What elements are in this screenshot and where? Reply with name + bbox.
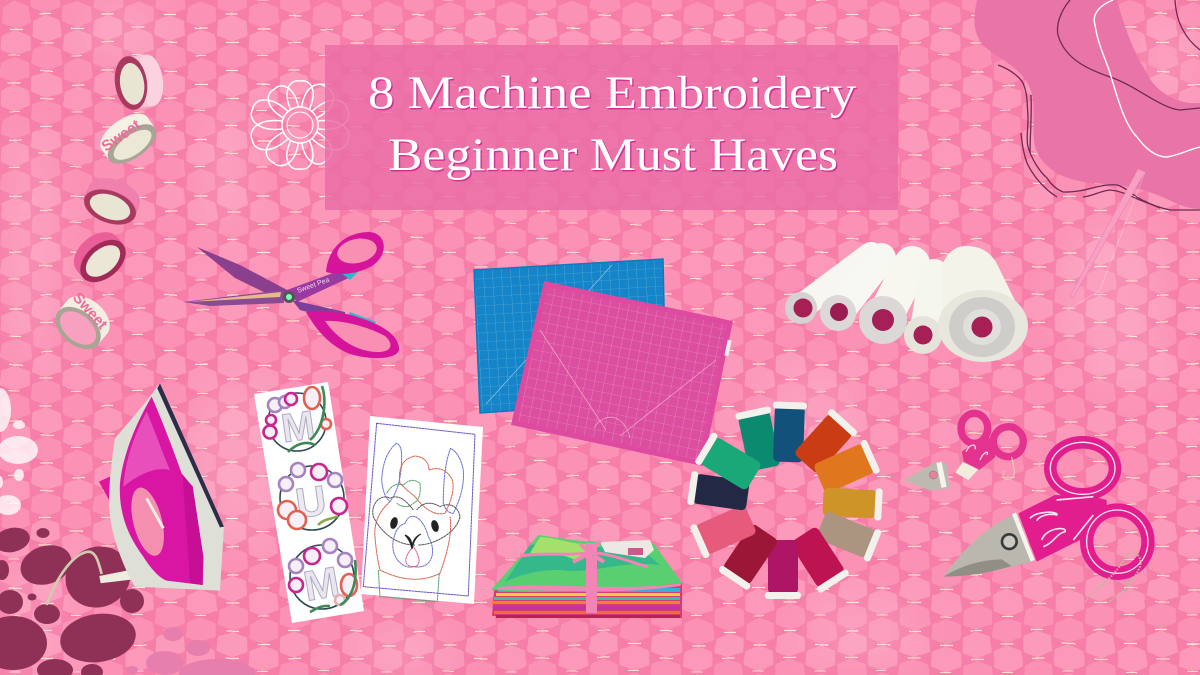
left-edge white pebbles xyxy=(0,388,38,515)
bottom-left dark pebbles xyxy=(0,525,144,675)
spool: teal xyxy=(735,406,783,472)
title: Beginner Must Haves xyxy=(388,129,838,181)
green top fabric xyxy=(491,535,682,592)
spool: red xyxy=(792,408,858,476)
title xyxy=(368,67,857,181)
spool: green xyxy=(694,432,763,493)
bead chain xyxy=(1085,553,1141,603)
roll 1 xyxy=(785,255,871,324)
wreath M top: M xyxy=(279,403,318,451)
tape roll 3 xyxy=(79,171,145,231)
roll 4 xyxy=(904,274,942,354)
spool: magenta xyxy=(765,540,801,599)
title panel xyxy=(325,45,898,210)
icon: needle xyxy=(1068,169,1145,310)
wreath M bottom xyxy=(289,539,357,612)
card: monogram wreaths xyxy=(254,382,364,623)
spool: gold xyxy=(822,486,883,521)
card: llama embroidery design xyxy=(361,416,483,604)
tape roll 2 label: Sweet xyxy=(99,116,144,155)
icon: rainbow scissors xyxy=(183,232,399,358)
wreath M bottom: M xyxy=(300,558,343,610)
spool: navy xyxy=(687,471,750,513)
bottom-left light pink pebbles xyxy=(126,627,255,675)
spool: taupe xyxy=(815,509,882,562)
spool: pink xyxy=(689,502,758,559)
roll 5 xyxy=(938,246,1028,362)
tape roll 2 xyxy=(94,106,163,172)
grey blade cover xyxy=(943,513,1035,577)
icon: embroidery thread wheel xyxy=(687,401,883,599)
tape roll 4 xyxy=(66,224,134,291)
wreath M top xyxy=(264,386,331,452)
pink cutting mat xyxy=(514,284,732,463)
icon: USB scissors xyxy=(904,413,1023,491)
roll 2 xyxy=(820,258,881,331)
washi tape rolls xyxy=(47,52,166,358)
roll 3 xyxy=(859,264,912,344)
fabric stack layers xyxy=(492,582,682,618)
spool: dark blue xyxy=(771,401,807,463)
wreath U middle xyxy=(278,463,347,530)
tape roll 5 xyxy=(47,288,118,358)
icon: cutting mats xyxy=(474,259,732,463)
spool: crimson xyxy=(788,525,850,594)
ribbon and tag xyxy=(520,540,654,613)
llama eyes and nose xyxy=(389,516,440,549)
tape roll 1 xyxy=(111,52,166,112)
icon: white flower outline xyxy=(248,79,352,171)
icon: steam iron xyxy=(47,383,224,605)
icon: fabric bundle xyxy=(491,535,682,618)
spool: orange xyxy=(812,439,881,496)
finger rings xyxy=(1050,442,1115,494)
wreath U middle: U xyxy=(293,476,329,527)
icon: large shears xyxy=(943,442,1148,603)
icon: stabilizer rolls xyxy=(785,246,1028,362)
top-right organic blob with curved lines xyxy=(974,0,1200,210)
embroidery design cards xyxy=(254,382,483,623)
spool: dark red xyxy=(718,522,781,591)
blue cutting mat xyxy=(474,259,666,413)
handle body xyxy=(1018,495,1107,562)
tape roll 5 label: Sweet xyxy=(69,289,111,333)
icon: rainbow scissors: Sweet Pea xyxy=(296,277,331,295)
title: 8 Machine Embroidery xyxy=(368,67,857,119)
